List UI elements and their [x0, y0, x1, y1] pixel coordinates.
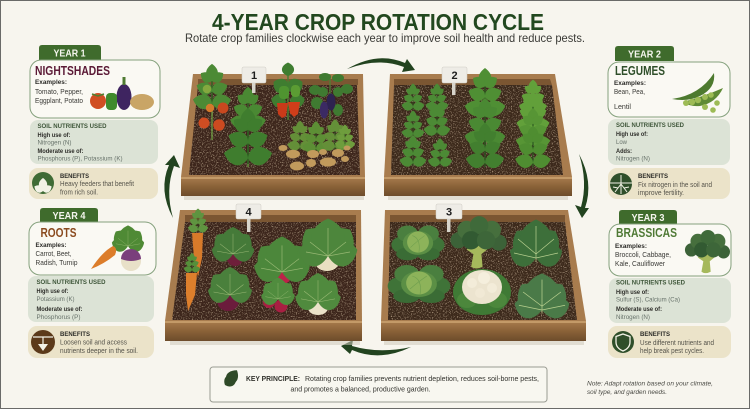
broccoli: [450, 216, 507, 268]
benefits box: BENEFITS: [60, 173, 89, 180]
examples: Examples:: [615, 243, 647, 250]
key principle text: KEY PRINCIPLE:: [246, 374, 300, 383]
potato plant: [278, 119, 356, 170]
benefits box: [608, 168, 730, 199]
icon: carrot and turnip: [91, 225, 147, 271]
benefits box: BENEFITS: [638, 173, 668, 180]
soil nutrients box: [28, 276, 154, 322]
benefits box: nutrients deeper in the soil.: [60, 348, 138, 355]
soil nutrients box: SOIL NUTRIENTS USED: [36, 279, 106, 286]
soil nutrients box: SOIL NUTRIENTS USED: [616, 280, 685, 286]
pepper plant: [270, 62, 306, 120]
soil nutrients box: High use of:: [38, 132, 70, 139]
examples: Bean, Pea,: [614, 87, 645, 96]
panel: year 3 brassicas: [608, 210, 731, 358]
benefits box: help break pest cycles.: [640, 348, 704, 355]
benefits box: Loosen soil and access: [60, 340, 127, 346]
soil nutrients box: Moderate use of:: [36, 306, 82, 313]
icon: deep root: [31, 330, 55, 354]
benefits box: [28, 326, 154, 358]
examples: [36, 242, 78, 267]
year 4 tab: YEAR 4: [52, 210, 86, 222]
crop family card: [30, 60, 160, 118]
tomato plants: [191, 64, 274, 167]
icon: pea pods: [672, 73, 723, 113]
soil nutrients box: Low: [616, 139, 627, 146]
eggplant plant: [309, 73, 353, 120]
soil nutrients box: High use of:: [616, 289, 649, 296]
garden bed 3: brassicas: [381, 204, 586, 345]
examples: [614, 80, 646, 111]
arrow: year 3 to year 4: [341, 340, 411, 355]
soil nutrients box: Phosphorus (P): [36, 314, 80, 321]
panel: year 4 roots: [28, 208, 156, 358]
year 2 tab: YEAR 2: [628, 48, 661, 60]
beets: [204, 227, 258, 311]
examples: [615, 243, 671, 268]
year 2 tab: [615, 46, 674, 61]
key principle text: and promotes a balanced, productive garden.: [290, 384, 430, 394]
year 1 tab: [39, 45, 101, 60]
key principle text: Rotating crop families prevents nutrient depletion, reduces soil-borne pests,: [305, 374, 539, 383]
examples: Examples:: [36, 242, 66, 249]
examples: Lentil: [614, 102, 631, 111]
subtitle: Rotate crop families clockwise each year to improve soil health and reduce pests.: [185, 31, 585, 45]
sign 1: [242, 67, 266, 93]
examples: Radish, Turnip: [36, 258, 78, 267]
crop family card: [609, 224, 731, 276]
arrow: year 2 to year 3: [575, 154, 589, 218]
crop family card: [608, 62, 730, 117]
benefits box: [608, 326, 731, 358]
arrow: year 4 to year 1: [164, 155, 180, 218]
soil nutrients box: [608, 119, 730, 165]
soil nutrients box: High use of:: [36, 288, 68, 295]
soil nutrients box: Nitrogen (N): [38, 140, 72, 146]
soil nutrients box: SOIL NUTRIENTS USED: [616, 122, 684, 129]
soil nutrients box: High use of:: [616, 131, 648, 138]
benefits box: Heavy feeders that benefit: [60, 181, 134, 188]
garden bed 1: nightshades: [181, 62, 365, 200]
benefits box: Use different nutrients and: [640, 340, 714, 347]
benefits box: Fix nitrogen in the soil and: [638, 182, 712, 189]
sign 2: 2: [451, 70, 458, 82]
icon: shield: [612, 331, 634, 353]
garden bed 4: roots: [165, 204, 362, 345]
benefits box: [29, 168, 158, 199]
soil nutrients box: SOIL NUTRIENTS USED: [38, 123, 107, 130]
icon: leaf: [32, 172, 54, 194]
family name: BRASSICAS: [616, 225, 677, 240]
icon: nightshade vegetables: [90, 77, 154, 110]
title: 4-YEAR CROP ROTATION CYCLE: [212, 9, 544, 35]
soil nutrients box: Moderate use of:: [38, 148, 84, 155]
panel: year 2 legumes: [608, 46, 730, 199]
crop family card: [29, 222, 156, 275]
sign 1: 1: [251, 70, 257, 82]
soil nutrients box: Nitrogen (N): [616, 314, 650, 321]
examples: Eggplant, Potato: [35, 96, 83, 105]
note: soil type, and garden needs.: [587, 389, 667, 396]
soil nutrients box: [30, 120, 158, 164]
sign 3: [436, 204, 462, 232]
examples: Carrot, Beet,: [36, 249, 72, 258]
carrots: [183, 208, 209, 311]
arrow: year 1 to year 2: [347, 58, 415, 72]
garden bed 2: legumes: [384, 67, 572, 200]
benefits box: from rich soil.: [60, 190, 98, 196]
note: [587, 380, 713, 396]
soil nutrients box: Nitrogen (N): [616, 156, 650, 162]
examples: Broccoli, Cabbage,: [615, 250, 671, 259]
icon: broccoli: [685, 230, 730, 273]
benefits box: BENEFITS: [60, 331, 90, 338]
examples: Examples:: [614, 80, 646, 87]
sign 3: 3: [446, 206, 452, 218]
climbing pea rows: [463, 68, 552, 170]
benefits box: improve fertility.: [638, 190, 684, 197]
cabbages: [388, 225, 450, 303]
family name: LEGUMES: [615, 63, 665, 78]
family name: ROOTS: [40, 225, 77, 240]
soil nutrients box: Adds:: [616, 148, 632, 155]
icon: leaves: [221, 367, 242, 389]
sign 4: 4: [245, 206, 252, 218]
soil nutrients box: Phosphorus (P), Potassium (K): [38, 156, 122, 162]
soil nutrients box: Sulfur (S), Calcium (Ca): [616, 296, 680, 304]
soil nutrients box: Potassium (K): [36, 296, 74, 303]
cauliflower: [453, 269, 511, 315]
examples: Tomato, Pepper,: [35, 87, 83, 96]
year 1 tab: YEAR 1: [54, 48, 86, 60]
soil nutrients box: Moderate use of:: [616, 306, 662, 313]
bush bean rows: [399, 84, 453, 168]
year 3 tab: YEAR 3: [632, 212, 665, 224]
turnips: [292, 218, 362, 315]
examples: Examples:: [35, 79, 67, 86]
panel: year 1 nightshades: [29, 45, 160, 199]
kale: [505, 220, 574, 321]
key principle text: [246, 374, 539, 394]
examples: [35, 79, 83, 105]
year 4 tab: [40, 208, 98, 222]
family name: NIGHTSHADES: [35, 63, 110, 78]
radishes: [250, 236, 314, 312]
year 3 tab: [619, 210, 677, 224]
icon: roots: [610, 173, 632, 195]
note: Note: Adapt rotation based on your climate,: [587, 380, 713, 388]
benefits box: BENEFITS: [640, 331, 670, 338]
sign 2: [442, 67, 467, 95]
soil nutrients box: [609, 278, 731, 323]
examples: Kale, Cauliflower: [615, 259, 666, 268]
sign 4: [236, 204, 261, 232]
callout: key principle: [210, 367, 547, 402]
